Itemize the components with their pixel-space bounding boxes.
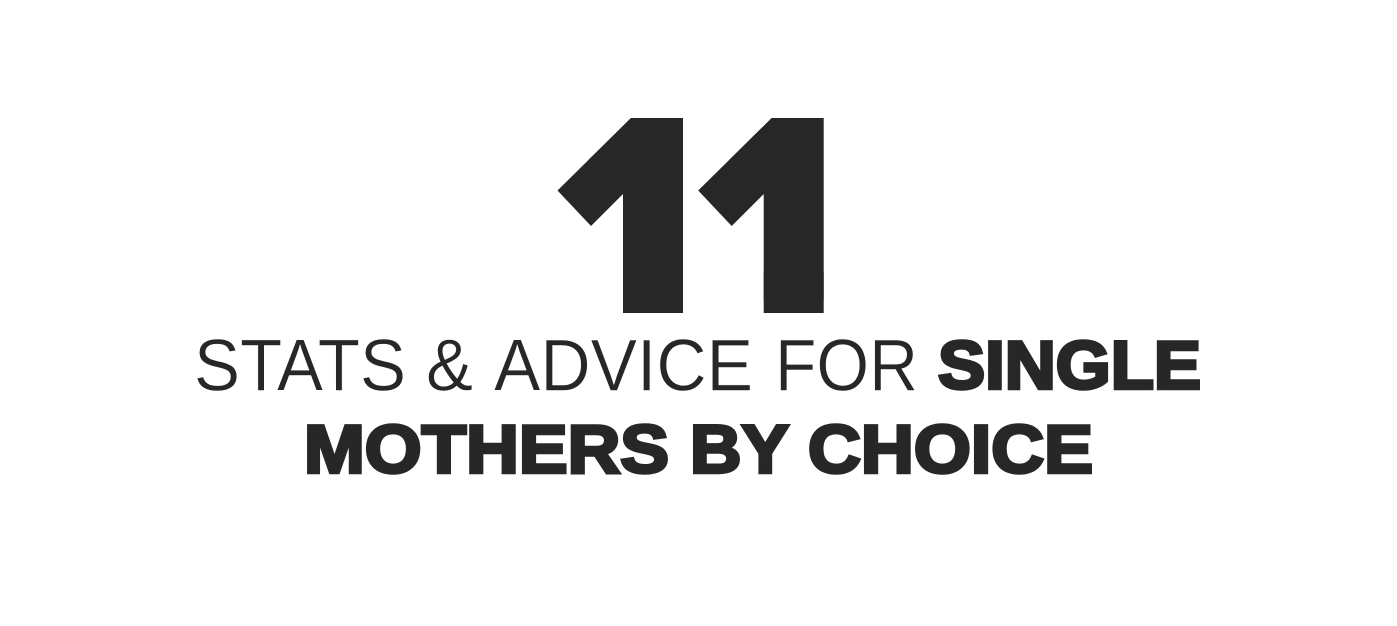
- title number: 11: [558, 118, 824, 313]
- heading line 1: stats and advice for single: [194, 326, 1201, 406]
- heading line 1: stats and advice for single: &: [426, 326, 473, 406]
- heading line 1: stats and advice for single: FOR: [775, 326, 918, 406]
- heading line 2: mothers by choice: [304, 412, 1093, 488]
- title number: 11: 1: [569, 48, 725, 360]
- heading line 1: stats and advice for single: SINGLE: [938, 328, 1201, 404]
- heading line 1: stats and advice for single: ADVICE: [494, 326, 753, 406]
- title number: 11: 1: [710, 48, 866, 360]
- heading line 2: mothers by choice: MOTHERS: [304, 412, 669, 488]
- heading line 2: mothers by choice: CHOICE: [808, 412, 1093, 488]
- heading line 1: stats and advice for single: STATS: [194, 326, 406, 406]
- heading line 2: mothers by choice: BY: [690, 412, 789, 488]
